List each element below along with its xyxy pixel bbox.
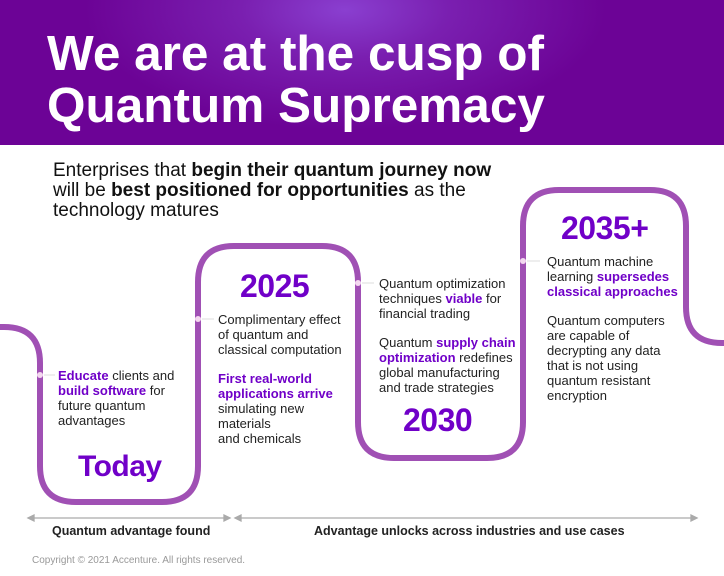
header banner — [0, 0, 724, 145]
stage: 2025: Complimentary effect — [218, 312, 341, 327]
copyright: Copyright © 2021 Accenture. All rights reserved. — [32, 555, 245, 566]
stage: 2035+: are capable of — [547, 328, 629, 343]
stage: 2035+: learning supersedes — [547, 269, 669, 284]
stage: 2030: Quantum supply chain — [379, 335, 516, 350]
stage: 2025: applications arrive — [218, 386, 333, 401]
stage: 2035+: decrypting any data — [547, 343, 660, 358]
stage: Today: future quantum — [58, 398, 145, 413]
title: We are at the cusp of — [47, 26, 544, 81]
stage: 2025: classical computation — [218, 342, 342, 357]
label: advantage unlocks: Advantage unlocks across industries and use cases — [314, 524, 625, 538]
stage: 2035+: encryption — [547, 388, 607, 403]
stage: 2030 — [379, 276, 516, 438]
stage: Today: Educate clients and — [58, 368, 174, 383]
stage: 2025: of quantum and — [218, 327, 308, 342]
markers — [37, 258, 526, 378]
intro text — [53, 160, 492, 221]
stage: 2035+: Quantum machine — [547, 254, 653, 269]
bottom arrows — [28, 515, 697, 521]
stage: 2025 — [218, 268, 342, 446]
stage: Today: advantages — [58, 413, 125, 428]
stage: 2030: optimization redefines — [379, 350, 513, 365]
stage: 2025: simulating new — [218, 401, 304, 416]
stage: 2030: and trade strategies — [379, 380, 494, 395]
stage: 2030: techniques viable for — [379, 291, 501, 306]
intro text: technology matures — [53, 200, 219, 221]
stage: 2035+: quantum resistant — [547, 373, 650, 388]
stage: 2025: materials — [218, 416, 271, 431]
stage: 2030: global manufacturing — [379, 365, 500, 380]
title — [47, 26, 545, 133]
stage: 2030: financial trading — [379, 306, 470, 321]
title: Quantum Supremacy — [47, 78, 545, 133]
stage: Today — [58, 368, 174, 483]
stage: 2035+: classical approaches Quantum computers — [547, 284, 678, 328]
stage: 2035+ — [547, 210, 678, 403]
stage: Today: build software for — [58, 383, 165, 398]
intro text: will be best positioned for opportunities as the — [53, 180, 466, 201]
stage: 2025: and chemicals — [218, 431, 301, 446]
intro text: Enterprises that begin their quantum journey now — [53, 160, 491, 181]
stage: Today: Today — [78, 450, 162, 483]
stage: 2025: First real-world — [218, 371, 312, 386]
stage: 2030: 2030 — [403, 402, 472, 438]
stage: 2030: Quantum optimization — [379, 276, 505, 291]
label: quantum advantage found: Quantum advantage found — [52, 524, 210, 538]
stage: 2025: 2025 — [240, 268, 309, 304]
stage: 2035+: 2035+ — [561, 210, 648, 246]
stage: 2035+: that is not using — [547, 358, 638, 373]
